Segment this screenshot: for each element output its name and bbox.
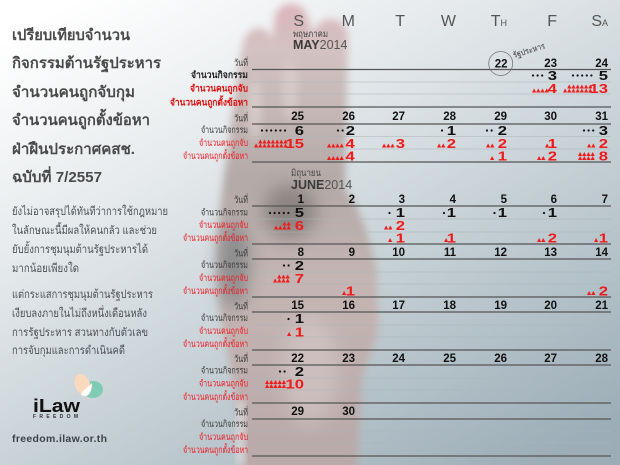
weekday header: S — [293, 13, 304, 30]
dates June: 20 — [544, 300, 557, 312]
dates June: 11 — [444, 247, 457, 259]
dates June: 29 — [291, 406, 304, 418]
row labels: week of June 8: วันที่ — [234, 246, 248, 260]
row labels: week of May 18: จำนวนคนถูกจับ — [190, 84, 248, 96]
charge counts: 1 — [396, 231, 405, 246]
title: เปรียบเทียบจำนวน — [12, 27, 131, 44]
row labels: week of May 18: วันที่ — [234, 56, 248, 69]
weekday header: M — [342, 13, 355, 30]
month heading: May: พฤษภาคม — [293, 29, 328, 40]
charge counts: 1 — [599, 231, 608, 246]
row labels: week of June 22: จำนวนคนถูกจับ — [199, 378, 248, 390]
dates June: 7 — [602, 194, 608, 206]
activity counts: 3 — [599, 124, 608, 138]
body text — [12, 205, 168, 357]
dates May — [291, 58, 609, 123]
arrest counts: 6 — [295, 219, 304, 233]
dates June: 30 — [342, 406, 355, 418]
title: กิจกรรมต้านรัฐประหาร — [12, 54, 162, 73]
arrest counts: 2 — [599, 137, 608, 151]
month heading: May: MAY2014 — [293, 38, 347, 52]
dates June: 1 — [298, 194, 305, 206]
row labels: week of June 1 — [183, 193, 248, 244]
body text: การจับกุมและการดำเนินคดี — [12, 344, 125, 357]
arrest counts: 4 — [548, 82, 558, 96]
title — [12, 27, 162, 186]
arrest counts: 2 — [396, 219, 405, 233]
coup day marker — [489, 41, 547, 76]
arrest counts: 15 — [285, 137, 304, 151]
blurred hand photo — [217, 4, 378, 465]
arrest counts — [254, 82, 608, 392]
activity counts: 6 — [295, 124, 304, 138]
row labels: week of June 1: จำนวนคนถูกจับ — [199, 220, 248, 231]
month heading: May — [293, 29, 347, 52]
weekday header: SA — [591, 13, 608, 30]
arrest counts: 7 — [295, 272, 304, 286]
charge counts: 4 — [346, 149, 356, 164]
activity counts: 1 — [447, 124, 456, 138]
month heading: June: มิถุนายน — [291, 168, 321, 179]
body text: ยับยั้งการชุมนุมต้านรัฐประหารได้ — [12, 241, 148, 256]
logo: iLaw Freedom — [33, 371, 103, 420]
row labels: week of June 15: จำนวนคนถูกตั้งข้อหา — [183, 337, 248, 350]
dates May: 28 — [443, 111, 457, 123]
activity counts: 5 — [295, 206, 304, 220]
dates June — [291, 194, 609, 418]
row labels: week of June 15: จำนวนคนถูกจับ — [199, 326, 248, 337]
dates June: 23 — [342, 353, 355, 365]
arrest counts: 2 — [498, 137, 507, 151]
activity counts: 3 — [548, 69, 557, 83]
dates June: 21 — [595, 300, 609, 312]
title: ฝ่าฝืนประกาศคสช. — [12, 141, 135, 158]
row labels: week of May 25: จำนวนกิจกรรม — [201, 125, 248, 136]
dates June: 10 — [392, 247, 405, 259]
dates June: 6 — [551, 194, 557, 206]
dates June: 16 — [342, 300, 355, 312]
logo: iLaw Freedom: iLaw — [33, 396, 81, 416]
activity counts: 2 — [295, 259, 304, 273]
charge counts: 1 — [498, 149, 507, 164]
dates June: 24 — [392, 353, 406, 365]
arrest counts: 13 — [589, 82, 608, 96]
dates June: 8 — [298, 247, 305, 259]
dates June: 15 — [291, 300, 305, 312]
weekday header: T — [395, 13, 405, 30]
weekday header — [293, 13, 608, 30]
coup day marker: 22 — [495, 58, 508, 70]
activity counts: 1 — [295, 312, 304, 326]
activity counts: 1 — [548, 206, 557, 220]
dates June: 26 — [494, 353, 507, 365]
dates June: 25 — [443, 353, 457, 365]
dates June: 2 — [349, 194, 355, 206]
coup day marker: รัฐประหาร — [512, 41, 547, 61]
activity counts: 1 — [396, 206, 405, 220]
dates June: 12 — [494, 247, 507, 259]
row labels: week of June 8: จำนวนคนถูกตั้งข้อหา — [183, 284, 248, 297]
dates June: 22 — [291, 353, 304, 365]
row labels: week of May 25 — [183, 112, 248, 162]
dates May: 30 — [544, 111, 557, 123]
row labels: week of June 1: วันที่ — [234, 193, 248, 206]
body text: เงียบลงภายในไม่ถึงหนึ่งเดือนหลัง — [12, 305, 147, 320]
weekday header: TH — [491, 13, 507, 30]
dates May: 25 — [291, 111, 305, 123]
row labels: week of June 8: จำนวนกิจกรรม — [201, 260, 248, 271]
activity counts: 2 — [295, 365, 304, 379]
dates May: 24 — [595, 58, 609, 70]
row labels: week of June 15 — [183, 300, 248, 350]
row labels: week of May 18: จำนวนคนถูกตั้งข้อหา — [170, 94, 248, 110]
dates June: 9 — [349, 247, 355, 259]
title: จำนวนคนถูกจับกุม — [12, 84, 135, 102]
body text: มากน้อยเพียงใด — [12, 262, 79, 275]
arrest counts: 4 — [346, 137, 356, 151]
charge counts: 2 — [548, 149, 557, 164]
charge counts: 2 — [599, 284, 608, 299]
row labels: week of June 15: วันที่ — [234, 300, 248, 312]
row labels: week of June 1: จำนวนกิจกรรม — [201, 208, 248, 218]
row labels: week of June 8: จำนวนคนถูกจับ — [199, 273, 248, 284]
row labels: week of June 1: จำนวนคนถูกตั้งข้อหา — [183, 231, 248, 244]
row labels: week of June 22: วันที่ — [234, 352, 248, 365]
row labels: week of June 22: จำนวนคนถูกตั้งข้อหา — [183, 390, 248, 403]
body text: การรัฐประหาร สวนทางกับตัวเลข — [12, 327, 148, 339]
dates May: 29 — [494, 111, 507, 123]
charge counts: 1 — [447, 231, 456, 246]
dates June: 28 — [595, 353, 609, 365]
row labels: week of June 29 — [183, 406, 248, 456]
dates June: 27 — [544, 353, 557, 365]
activity counts: 2 — [498, 124, 507, 138]
dates June: 4 — [450, 194, 457, 206]
dates June: 3 — [399, 194, 405, 206]
row labels: week of June 22: จำนวนกิจกรรม — [201, 366, 248, 376]
row labels: week of June 22 — [183, 352, 248, 403]
row labels: week of June 29: จำนวนคนถูกตั้งข้อหา — [183, 443, 248, 456]
dates May: 27 — [392, 111, 405, 123]
row labels: week of May 25: วันที่ — [234, 112, 248, 124]
body text: ยังไม่อาจสรุปได้ทันทีว่าการใช้กฎหมาย — [12, 205, 168, 218]
dates May: 26 — [342, 111, 355, 123]
row labels: week of June 29: จำนวนกิจกรรม — [201, 419, 248, 430]
arrest counts: 1 — [295, 325, 304, 340]
month heading: June — [291, 168, 352, 192]
dates June: 18 — [443, 300, 457, 312]
dates June: 14 — [595, 247, 609, 259]
dates June: 19 — [494, 300, 507, 312]
activity counts: 5 — [599, 69, 608, 83]
dates May: 23 — [544, 58, 557, 70]
arrest counts: 2 — [447, 137, 456, 151]
website url: freedom.ilaw.or.th — [12, 433, 107, 445]
weekday header: F — [547, 13, 557, 30]
row labels: week of May 18 — [170, 56, 248, 110]
calendar grid lines — [252, 70, 611, 456]
dates June: 5 — [501, 194, 508, 206]
title: ฉบับที่ 7/2557 — [12, 166, 102, 186]
logo: iLaw Freedom: FREEDOM — [33, 414, 78, 420]
body text: แต่กระแสการชุมนุมต้านรัฐประหาร — [12, 288, 153, 301]
row labels: week of May 18: จำนวนกิจกรรม — [191, 70, 248, 81]
row labels: week of May 25: จำนวนคนถูกจับ — [199, 138, 248, 149]
charge counts — [327, 149, 608, 299]
row labels: week of June 15: จำนวนกิจกรรม — [201, 313, 248, 324]
weekday header: W — [441, 13, 457, 30]
row labels: week of June 29: จำนวนคนถูกจับ — [199, 432, 248, 443]
charge counts: 1 — [346, 284, 355, 299]
month heading: June: JUNE2014 — [291, 178, 352, 192]
charge counts: 8 — [599, 149, 608, 164]
dates June: 13 — [544, 247, 557, 259]
charge counts: 2 — [548, 231, 557, 246]
row labels: week of June 29: วันที่ — [234, 406, 248, 418]
activity counts: 1 — [447, 206, 456, 220]
body text: ในลักษณะนี้มีผลให้คนกลัว และช่วย — [12, 222, 157, 237]
dates May: 31 — [595, 111, 609, 123]
row labels: week of June 8 — [183, 246, 248, 297]
activity counts: 2 — [346, 124, 355, 138]
activity counts: 1 — [498, 206, 507, 220]
arrest counts: 10 — [285, 377, 304, 392]
dates June: 17 — [392, 300, 405, 312]
arrest counts: 3 — [396, 137, 405, 151]
row labels: week of May 25: จำนวนคนถูกตั้งข้อหา — [183, 149, 248, 162]
title: จำนวนคนถูกตั้งข้อหา — [12, 108, 150, 130]
activity counts — [262, 69, 608, 379]
arrest counts: 1 — [548, 137, 557, 151]
